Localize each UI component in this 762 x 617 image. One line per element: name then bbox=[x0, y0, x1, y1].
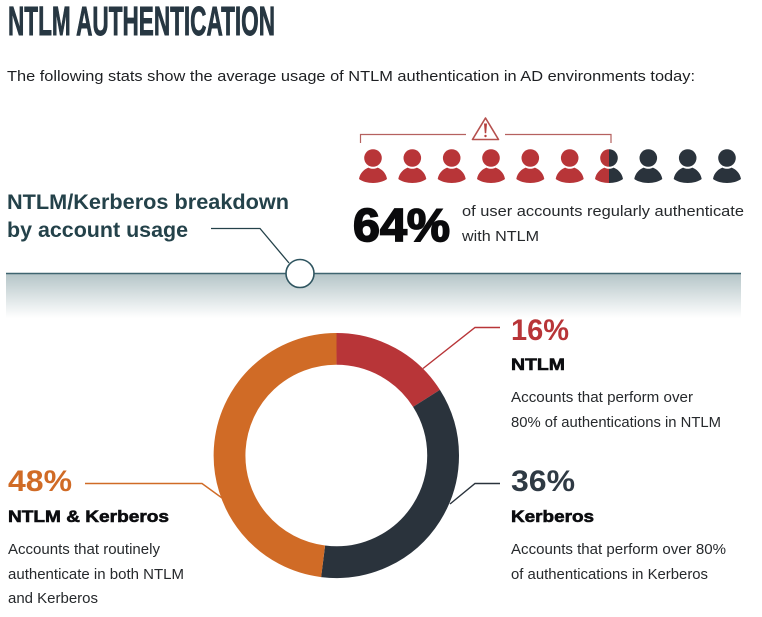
icon: warning triangle bbox=[472, 118, 498, 140]
bracket with warning icon bbox=[360, 118, 611, 143]
callout: NTLM 16%: NTLM bbox=[511, 355, 565, 374]
callout: NTLM and Kerberos 48%: 48% bbox=[8, 465, 72, 498]
divider line bbox=[6, 272, 741, 274]
donut chart bbox=[230, 349, 443, 562]
intro text: The following stats show the average usage of NTLM authentication in AD environments today: bbox=[7, 68, 695, 85]
callout: NTLM and Kerberos 48% bbox=[8, 465, 184, 607]
big stat: 64%: 64% bbox=[353, 199, 450, 251]
callout: NTLM 16%: 16% bbox=[511, 314, 569, 347]
callout: NTLM and Kerberos 48%: and Kerberos bbox=[8, 591, 98, 607]
callout: Kerberos 36% bbox=[511, 465, 726, 583]
gradient band bbox=[6, 274, 741, 318]
leader: NTLM bbox=[423, 328, 500, 368]
section heading bbox=[7, 191, 289, 242]
callout: NTLM 16%: 80% of authentications in NTLM bbox=[511, 415, 721, 431]
divider circle marker bbox=[286, 260, 314, 288]
callout: NTLM 16%: Accounts that perform over bbox=[511, 390, 693, 406]
callout: NTLM and Kerberos 48%: NTLM & Kerberos bbox=[8, 507, 169, 526]
stat description: of user accounts regularly authenticate bbox=[462, 204, 744, 220]
leader: Kerberos bbox=[450, 484, 500, 504]
segment: NTLM and Kerberos 48% bbox=[230, 349, 336, 561]
leader line to divider bbox=[211, 228, 289, 263]
callout: NTLM and Kerberos 48%: Accounts that routinely bbox=[8, 542, 161, 558]
section heading: by account usage bbox=[7, 219, 188, 242]
callout: NTLM 16% bbox=[511, 314, 721, 431]
callout: Kerberos 36%: Kerberos bbox=[511, 507, 594, 526]
segment: Kerberos 36% bbox=[323, 398, 443, 562]
callout: Kerberos 36%: 36% bbox=[511, 465, 575, 498]
stat description bbox=[461, 204, 744, 245]
segment: NTLM 16% bbox=[336, 349, 426, 398]
stat description: with NTLM bbox=[461, 229, 539, 245]
callout: NTLM and Kerberos 48%: authenticate in both NTLM bbox=[8, 567, 184, 583]
icon row: ten user accounts, 6.4 highlighted bbox=[359, 149, 741, 183]
section heading: NTLM/Kerberos breakdown bbox=[7, 191, 289, 214]
leader: NTLM and Kerberos bbox=[85, 484, 222, 498]
callout: Kerberos 36%: Accounts that perform over 80% bbox=[511, 542, 726, 558]
callout: Kerberos 36%: of authentications in Kerberos bbox=[511, 567, 708, 583]
